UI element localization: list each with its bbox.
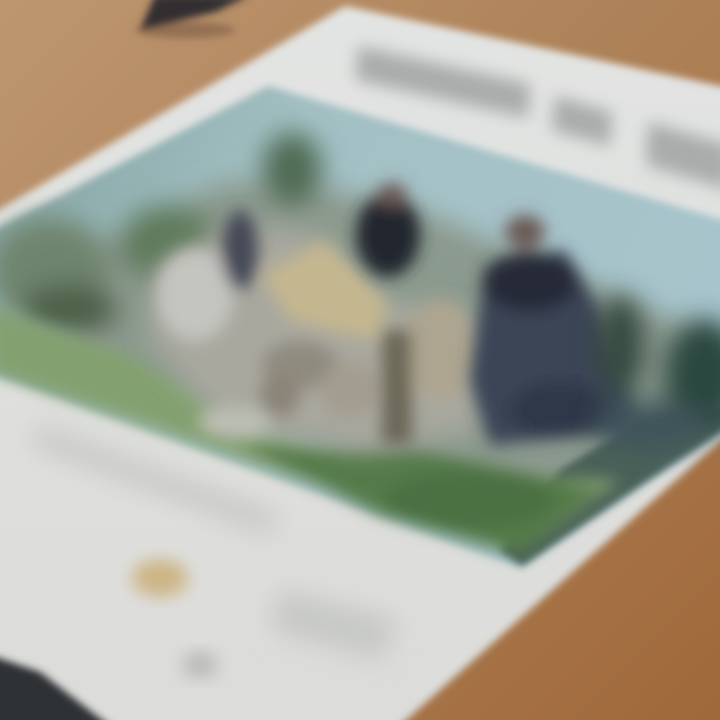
photo lower-right shadow [500, 405, 720, 566]
photo house [150, 225, 480, 450]
photo trees right [595, 295, 720, 449]
panel: property photo [0, 86, 720, 568]
photo figure right [470, 215, 640, 445]
photo sky [0, 86, 720, 568]
text block: blurred brochure body copy [30, 425, 400, 660]
icon: gold seal [132, 559, 188, 597]
photo hills and distant trees [0, 132, 720, 520]
icon: small gray mark [182, 651, 218, 679]
icon: black pen on desk [135, 0, 250, 38]
photo figure left [356, 183, 420, 277]
dark object in the bottom-left corner [0, 655, 115, 720]
heading: blurred brochure title band [356, 46, 720, 190]
photo lawn [0, 305, 620, 555]
